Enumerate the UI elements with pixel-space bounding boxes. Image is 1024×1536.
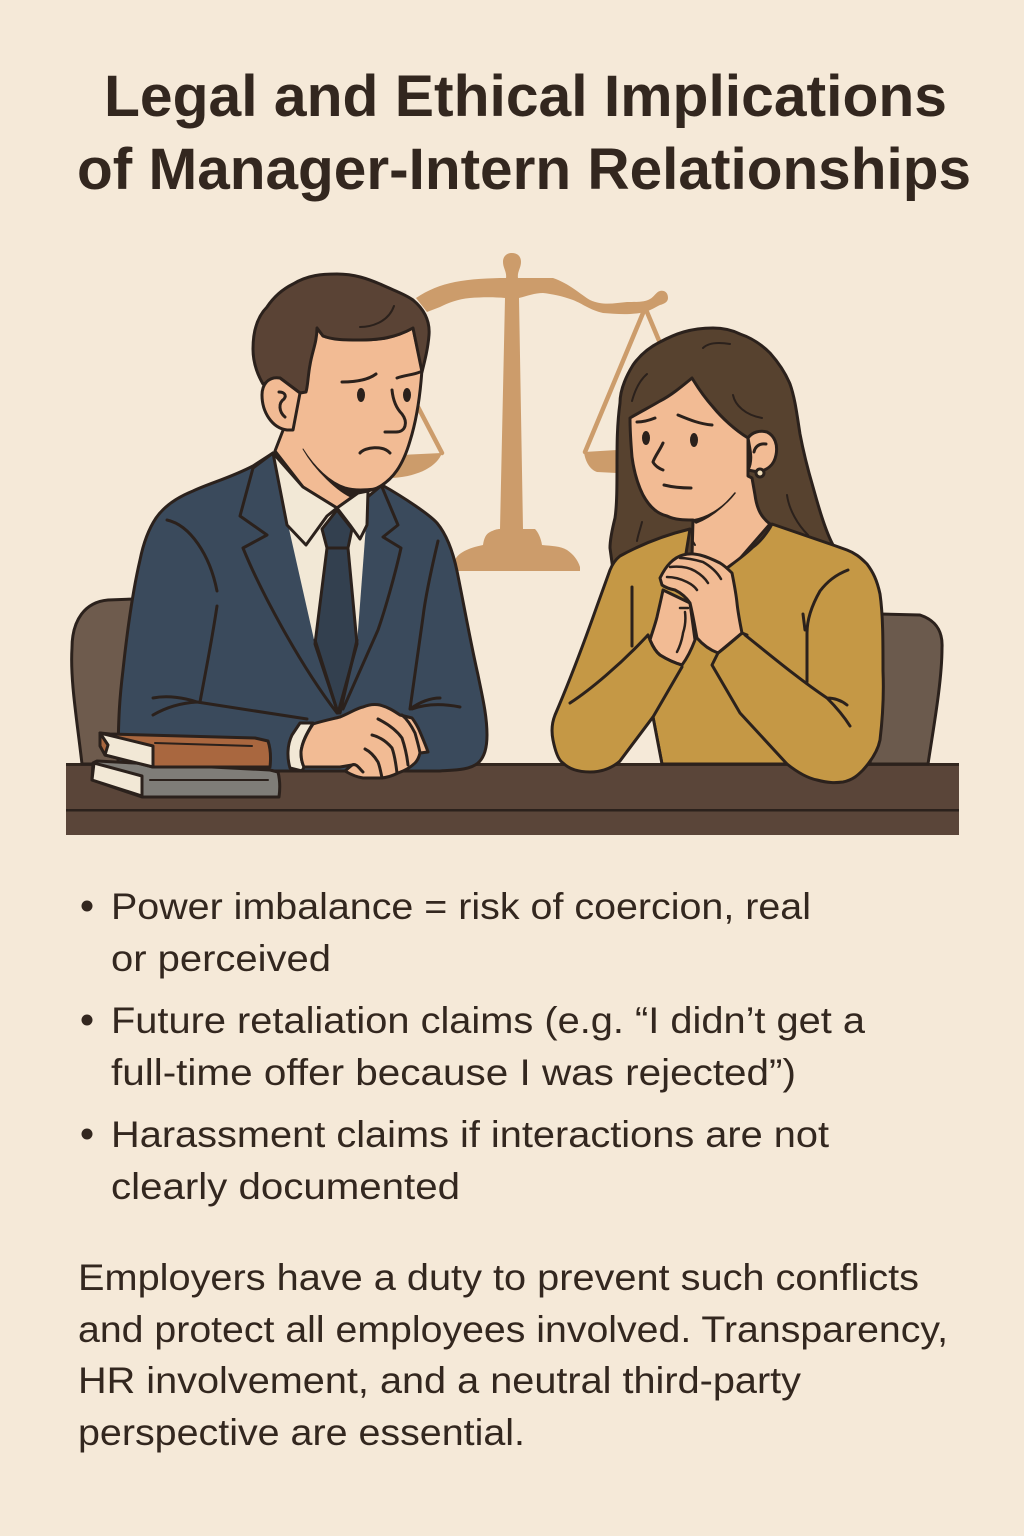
woman's face details xyxy=(632,343,808,541)
cuff xyxy=(288,723,313,771)
closing paragraph: Employers have a duty to prevent such conflicts xyxy=(78,1257,919,1298)
hair xyxy=(253,274,429,393)
tie xyxy=(315,510,357,713)
bullet 1: or perceived xyxy=(111,938,331,979)
closing paragraph xyxy=(78,1257,948,1453)
title: of Manager-Intern Relationships xyxy=(77,137,971,202)
bottom book xyxy=(92,761,280,797)
jacket xyxy=(118,453,487,771)
manager xyxy=(118,274,487,778)
hand xyxy=(301,704,428,778)
closing paragraph: and protect all employees involved. Transparency, xyxy=(78,1309,948,1350)
icon: scales of justice xyxy=(393,253,668,571)
ear xyxy=(748,431,777,472)
bullet 1: Power imbalance = risk of coercion, real xyxy=(111,886,811,927)
lapels and sleeves xyxy=(153,453,460,719)
icon: stacked books xyxy=(92,733,280,797)
sweater xyxy=(552,524,883,783)
bullet list xyxy=(82,886,865,1207)
bullet 2: full-time offer because I was rejected”) xyxy=(111,1052,796,1093)
earring xyxy=(756,469,764,477)
intern xyxy=(552,328,883,783)
table xyxy=(66,763,959,835)
hand: upper xyxy=(660,554,742,653)
jaw shadow xyxy=(693,493,735,523)
face details xyxy=(342,372,420,453)
bullet 3 xyxy=(82,1114,830,1207)
bullet 1 xyxy=(82,886,811,979)
ear xyxy=(262,378,300,430)
illustration: manager and intern at a table xyxy=(66,253,959,835)
bullet 2: Future retaliation claims (e.g. “I didn’t get a xyxy=(111,1000,865,1041)
chair: manager xyxy=(72,599,135,764)
long hair xyxy=(610,328,835,570)
closing paragraph: perspective are essential. xyxy=(78,1412,525,1453)
top book xyxy=(100,733,271,767)
face xyxy=(630,378,770,570)
title xyxy=(77,64,971,202)
collar xyxy=(273,453,337,545)
chin shadow xyxy=(303,449,377,498)
sweater fold lines xyxy=(570,570,850,726)
bullet 3: clearly documented xyxy=(111,1166,460,1207)
closing paragraph: HR involvement, and a neutral third-party xyxy=(78,1360,802,1401)
gap between arm and torso xyxy=(620,717,661,762)
chair: intern xyxy=(870,614,942,764)
title: Legal and Ethical Implications xyxy=(104,64,947,129)
shirt xyxy=(287,487,366,644)
neck and face xyxy=(275,328,422,508)
hand: lower xyxy=(650,590,695,665)
bullet 2 xyxy=(82,1000,865,1093)
cuffs xyxy=(648,633,787,764)
bullet 3: Harassment claims if interactions are not xyxy=(111,1114,830,1155)
